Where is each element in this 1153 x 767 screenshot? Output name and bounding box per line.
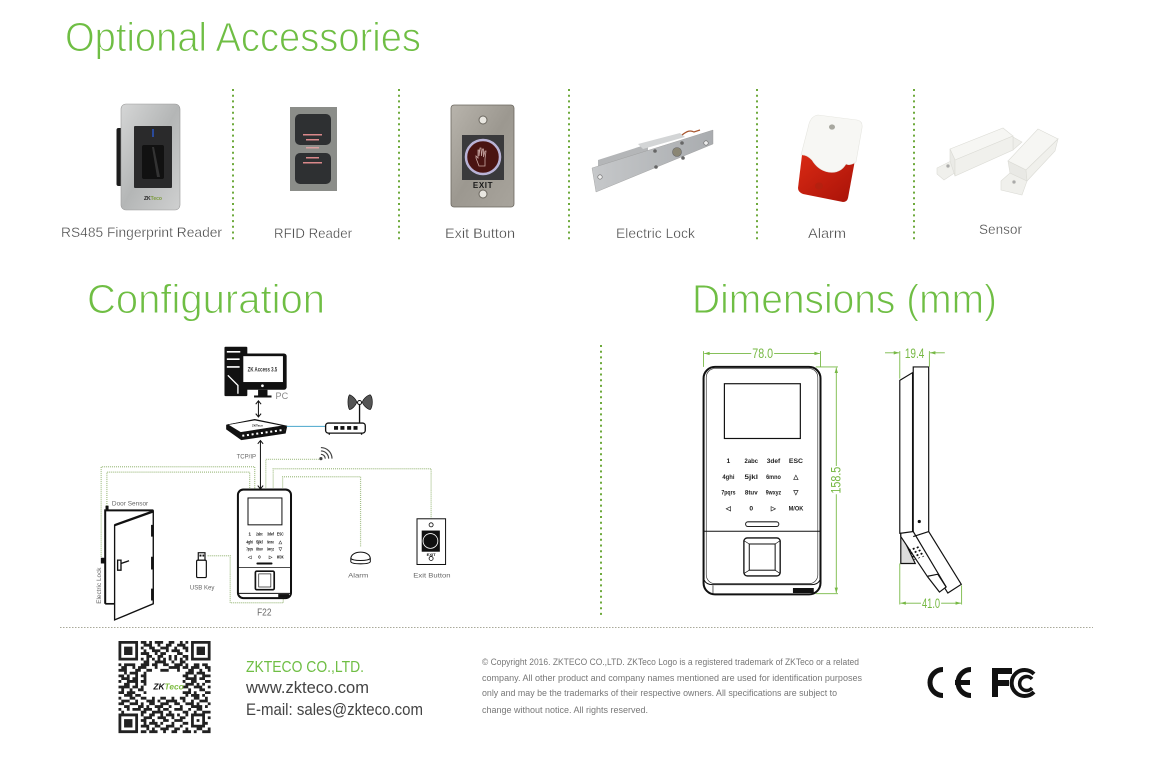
front view of device: 7pqrs [721, 490, 736, 497]
F22 device: 8tuv [256, 547, 263, 552]
label: Alarm: Alarm [348, 573, 369, 580]
dimension: depth 41.0: 41.0 [922, 596, 940, 611]
icon: door [101, 506, 153, 620]
dimension: depth 19.4: 19.4 [905, 346, 925, 361]
icon: network switch: ZKTeco [252, 423, 263, 427]
icon: wifi signal [320, 448, 332, 460]
dimension: height 158.5: 158.5 [829, 467, 844, 494]
label: PC: PC [276, 391, 289, 401]
label: TCP/IP: TCP/IP [237, 453, 257, 460]
QR code [118, 642, 211, 732]
label: Exit Button: Exit Button [413, 573, 451, 580]
dimension: width 78.0: 78.0 [752, 346, 773, 361]
F22 device: ▷ [268, 554, 273, 559]
icon: alarm [351, 552, 370, 564]
front view of device: 8tuv [745, 490, 758, 497]
F22 device: 9wxyz [267, 547, 274, 552]
label: Exit Button: Exit Button [445, 225, 515, 241]
F22 device: M/OK [277, 554, 284, 559]
F22 device [238, 490, 291, 598]
email: E-mail: sales@zkteco.com [246, 701, 423, 719]
label: USB Key: USB Key [190, 584, 215, 591]
icon: RS485 fingerprint reader: ZKTeco [144, 196, 162, 202]
F22 device: ESC [277, 532, 284, 537]
heading: Configuration: Configuration [87, 276, 325, 322]
front view of device: 4ghi [722, 474, 735, 481]
icon: desktop PC [224, 347, 287, 397]
arrow: switch to F22 [258, 441, 263, 489]
label: Electric Lock: Electric Lock [616, 225, 696, 241]
dotted connection wires [101, 459, 431, 603]
company name: ZKTECO CO.,LTD. [246, 659, 364, 676]
front view of device: ESC [789, 458, 803, 465]
side view of device [900, 367, 961, 593]
dimension: width 78.0 [704, 346, 820, 367]
front view of device: 0 [749, 505, 753, 512]
front view of device: M/OK [789, 505, 803, 512]
wire: switch to router [287, 425, 326, 428]
F22 device: 2abc [256, 532, 263, 537]
front view of device: 1 [727, 458, 731, 465]
website: www.zkteco.com [245, 679, 369, 697]
front view of device: 5jkl [745, 474, 758, 481]
divider: configuration and dimensions [600, 345, 602, 617]
label: Sensor: Sensor [979, 221, 1022, 237]
arrow: PC to switch [256, 401, 261, 417]
icon: electric lock [592, 130, 713, 192]
front view of device: ◁ [725, 505, 732, 512]
F22 device: 1 [248, 532, 251, 537]
configuration diagram [96, 347, 451, 620]
front view of device: 6mno [766, 474, 781, 481]
F22 device: 6mno [267, 540, 274, 545]
label: RFID Reader: RFID Reader [274, 225, 352, 241]
divider column: accessory separators [233, 89, 914, 240]
dimension: depth 41.0 [900, 563, 962, 611]
F22 device: ◁ [247, 554, 252, 559]
icon: door sensor [937, 128, 1058, 195]
copyright notice: only and may be the trademarks of their respective owners. All specifications are subject to [482, 688, 837, 698]
icon: CE mark [930, 670, 971, 696]
copyright notice: company. All other product and company names mentioned are used for identification purposes [482, 673, 863, 683]
footer divider [60, 626, 1093, 628]
dimension: height 158.5 [816, 367, 844, 594]
copyright notice [482, 657, 863, 715]
icon: exit button [417, 519, 446, 564]
label: F22: F22 [257, 608, 272, 619]
dimensions drawings [704, 346, 962, 611]
F22 device: 7pqrs [246, 547, 253, 552]
copyright notice: change without notice. All rights reserved. [482, 705, 648, 715]
F22 device: 4ghi [246, 540, 253, 545]
icon: exit button: EXIT [473, 181, 493, 190]
icon: FCC mark [995, 670, 1034, 697]
label: Door Sensor: Door Sensor [112, 501, 149, 508]
F22 device: 5jkl [256, 540, 263, 545]
icon: exit button: EXIT [427, 552, 436, 557]
front view of device: 9wxyz [766, 490, 782, 497]
icon: wireless router [326, 395, 372, 435]
icon: USB key [197, 553, 206, 578]
front view of device: △ [792, 474, 799, 481]
label: Electric Lock: Electric Lock [96, 567, 103, 604]
icon: exit button [451, 105, 514, 207]
front view of device: 2abc [745, 458, 758, 465]
F22 device: ▽ [278, 547, 283, 552]
icon: RS485 fingerprint reader [116, 104, 180, 210]
front view of device: ▽ [792, 490, 799, 497]
front view of device: ▷ [770, 505, 777, 512]
dimension: depth 19.4 [885, 346, 945, 379]
F22 device: 3def [267, 532, 274, 537]
front view of device: 3def [767, 458, 781, 465]
icon: RFID reader [290, 107, 337, 191]
icon: desktop PC: ZK Access 3.5 [248, 366, 278, 373]
label: RS485 Fingerprint Reader: RS485 Fingerprint Reader [61, 224, 222, 240]
heading: Dimensions (mm): Dimensions (mm) [692, 276, 997, 322]
label: Alarm: Alarm [808, 225, 846, 241]
copyright notice: © Copyright 2016. ZKTECO CO.,LTD. ZKTeco Logo is a registered trademark of ZKTeco or a related [482, 657, 859, 667]
F22 device: △ [278, 540, 283, 545]
front view of device [704, 367, 820, 594]
icon: network switch [226, 419, 287, 440]
title: Optional Accessories: Optional Accessories [65, 14, 421, 60]
QR code: ZKTeco [152, 682, 184, 692]
F22 device: 0 [258, 554, 261, 559]
icon: alarm [798, 115, 862, 202]
